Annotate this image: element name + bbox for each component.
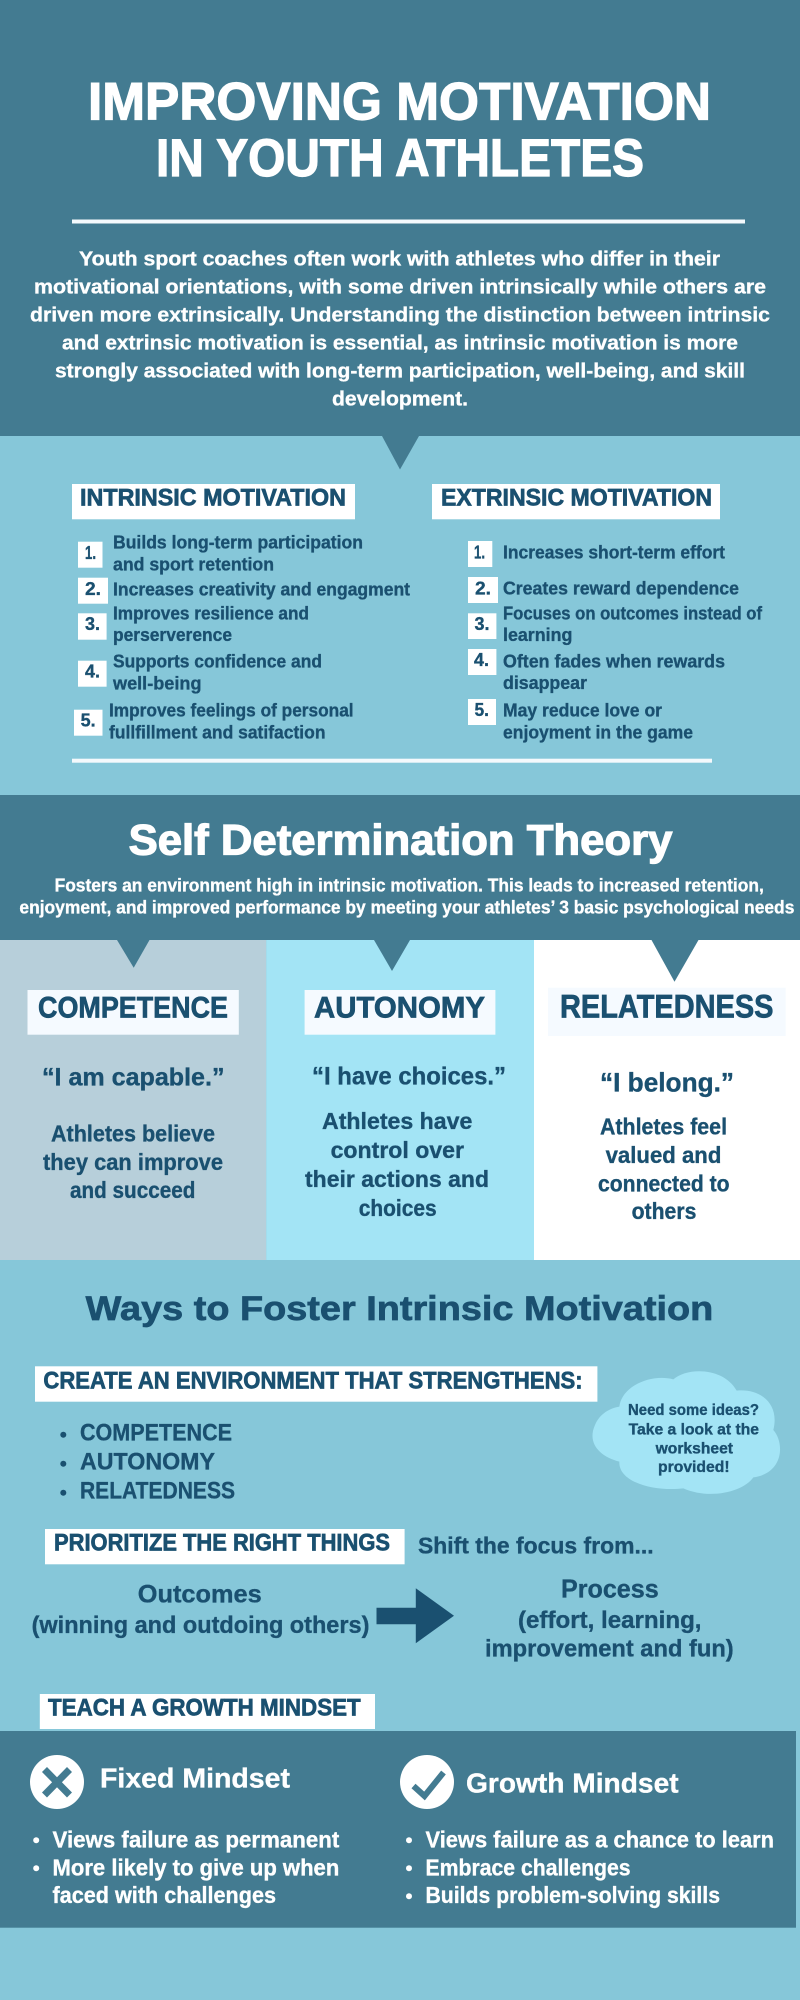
section: create an environment bbox=[35, 1366, 597, 1505]
process text: improvement and fun) bbox=[485, 1636, 734, 1663]
heading: relatedness: RELATEDNESS bbox=[560, 988, 774, 1024]
heading: self determination theory: Self Determination Theory bbox=[129, 816, 672, 864]
intro paragraph: Youth sport coaches often work with athletes who differ in their bbox=[79, 249, 720, 271]
theory description: Fosters an environment high in intrinsic motivation. This leads to increased retention, bbox=[55, 876, 764, 896]
intrinsic item 5: 5. bbox=[81, 710, 96, 731]
outcomes text: Outcomes bbox=[138, 1581, 262, 1609]
panel: relatedness bbox=[534, 940, 800, 1260]
intro paragraph: development. bbox=[332, 389, 468, 411]
intrinsic item 3: perserverence bbox=[113, 624, 232, 645]
autonomy description: choices bbox=[359, 1195, 437, 1221]
autonomy description bbox=[305, 1108, 489, 1221]
intro paragraph: and extrinsic motivation is essential, as intrinsic motivation is more bbox=[62, 333, 738, 355]
arrow: outcomes to process bbox=[376, 1588, 454, 1643]
heading: competence: COMPETENCE bbox=[38, 991, 228, 1024]
panel: extrinsic motivation bbox=[432, 484, 763, 742]
title bbox=[88, 72, 711, 188]
quote: capable: “I am capable.” bbox=[42, 1064, 225, 1092]
panel: mindsets bbox=[0, 1731, 796, 1928]
arrow: autonomy pointer bbox=[374, 940, 410, 971]
heading: growth mindset: Growth Mindset bbox=[466, 1768, 679, 1799]
intrinsic item 2: Increases creativity and engagment bbox=[113, 578, 410, 599]
section: prioritize the right things bbox=[32, 1529, 734, 1663]
arrow: competence pointer bbox=[117, 940, 150, 968]
panel: autonomy bbox=[266, 940, 534, 1260]
relatedness description bbox=[598, 1114, 730, 1224]
quote: belong: “I belong.” bbox=[600, 1068, 734, 1098]
list: fixed mindset: faced with challenges bbox=[52, 1882, 276, 1908]
heading: autonomy bbox=[305, 990, 495, 1035]
title: IMPROVING MOTIVATION bbox=[88, 72, 711, 132]
icon: check circle bbox=[400, 1755, 454, 1809]
heading: teach a growth mindset: TEACH A GROWTH MINDSET bbox=[48, 1695, 361, 1722]
extrinsic item 4: disappear bbox=[503, 672, 587, 693]
extrinsic item 5: May reduce love or bbox=[503, 699, 662, 720]
heading: competence bbox=[28, 990, 239, 1035]
intrinsic item 5 bbox=[74, 699, 354, 742]
extrinsic item 5: 5. bbox=[474, 699, 489, 720]
intrinsic item 2: 2. bbox=[85, 578, 101, 599]
callout: worksheet cloud: worksheet bbox=[655, 1440, 734, 1457]
intrinsic item 3 bbox=[78, 602, 309, 645]
intrinsic item 1 bbox=[78, 531, 363, 574]
relatedness description: valued and bbox=[606, 1142, 721, 1168]
extrinsic item 2 bbox=[468, 577, 739, 603]
competence description: they can improve bbox=[43, 1149, 223, 1175]
autonomy description: their actions and bbox=[305, 1166, 489, 1192]
heading: autonomy: AUTONOMY bbox=[314, 991, 485, 1024]
theory description bbox=[19, 876, 794, 918]
intrinsic item 5: fullfillment and satifaction bbox=[109, 721, 326, 742]
extrinsic item 1: 1. bbox=[474, 541, 485, 562]
shift the focus label: Shift the focus from... bbox=[418, 1533, 654, 1559]
relatedness description: others bbox=[632, 1198, 696, 1224]
panel: intrinsic motivation bbox=[72, 484, 410, 742]
panel: competence bbox=[0, 940, 266, 1260]
competence description bbox=[43, 1121, 223, 1203]
list: fixed mindset: Views failure as permanent bbox=[52, 1826, 340, 1852]
process text: (effort, learning, bbox=[518, 1607, 702, 1634]
list: fixed mindset bbox=[33, 1826, 340, 1908]
intrinsic item 1: Builds long-term participation bbox=[113, 531, 363, 552]
extrinsic item 3: learning bbox=[503, 624, 572, 645]
extrinsic item 2: 2. bbox=[475, 577, 491, 598]
icon: x circle bbox=[30, 1755, 84, 1809]
extrinsic item 3 bbox=[468, 602, 763, 645]
process text: Process bbox=[561, 1573, 659, 1603]
autonomy description: control over bbox=[331, 1137, 464, 1163]
callout: worksheet cloud bbox=[592, 1371, 780, 1494]
heading: extrinsic: EXTRINSIC MOTIVATION bbox=[441, 485, 712, 512]
extrinsic item 4: 4. bbox=[474, 649, 489, 670]
list: growth mindset: Views failure as a chance to learn bbox=[426, 1826, 774, 1852]
heading: prioritize: PRIORITIZE THE RIGHT THINGS bbox=[54, 1530, 390, 1557]
list: growth mindset: Embrace challenges bbox=[426, 1854, 631, 1880]
extrinsic item 5: enjoyment in the game bbox=[503, 721, 693, 742]
list: growth mindset bbox=[406, 1826, 774, 1908]
intrinsic item 5: Improves feelings of personal bbox=[109, 699, 354, 720]
intro paragraph: motivational orientations, with some driven intrinsically while others are bbox=[34, 277, 766, 299]
extrinsic item 1 bbox=[468, 541, 725, 567]
extrinsic item 1: Increases short-term effort bbox=[503, 541, 725, 562]
callout: worksheet cloud: Take a look at the bbox=[629, 1421, 759, 1438]
heading: relatedness bbox=[548, 988, 786, 1036]
quote: choices: “I have choices.” bbox=[312, 1063, 506, 1091]
header divider bbox=[72, 220, 745, 224]
title: IN YOUTH ATHLETES bbox=[156, 129, 644, 188]
list: three needs: AUTONOMY bbox=[80, 1449, 215, 1476]
heading: fixed mindset: Fixed Mindset bbox=[100, 1762, 290, 1793]
intrinsic item 2 bbox=[78, 578, 410, 604]
relatedness description: Athletes feel bbox=[600, 1114, 727, 1140]
arrow: header pointer bbox=[382, 436, 419, 470]
heading: intrinsic: INTRINSIC MOTIVATION bbox=[80, 485, 346, 512]
competence description: Athletes believe bbox=[51, 1121, 215, 1147]
extrinsic item 3: Focuses on outcomes instead of bbox=[503, 602, 763, 623]
list: three needs: COMPETENCE bbox=[80, 1420, 232, 1447]
extrinsic item 4 bbox=[468, 649, 725, 693]
outcomes text: (winning and outdoing others) bbox=[32, 1612, 369, 1639]
intro paragraph: strongly associated with long-term participation, well-being, and skill bbox=[55, 361, 745, 383]
process text bbox=[485, 1573, 734, 1663]
list: growth mindset: Builds problem-solving skills bbox=[426, 1882, 720, 1908]
relatedness description: connected to bbox=[598, 1170, 730, 1196]
list: fixed mindset: More likely to give up when bbox=[52, 1854, 339, 1880]
intrinsic item 4: 4. bbox=[85, 661, 100, 682]
panel: header bbox=[0, 0, 800, 436]
intrinsic item 1: and sport retention bbox=[113, 553, 274, 574]
competence description: and succeed bbox=[70, 1177, 195, 1203]
intrinsic item 4: Supports confidence and bbox=[113, 650, 322, 671]
callout: worksheet cloud: Need some ideas? bbox=[628, 1402, 759, 1419]
theory description: enjoyment, and improved performance by meeting your athletes’ 3 basic psychological needs bbox=[19, 898, 794, 918]
outcomes text bbox=[32, 1581, 369, 1639]
intro paragraph bbox=[30, 249, 770, 411]
intrinsic item 1: 1. bbox=[85, 542, 96, 563]
autonomy description: Athletes have bbox=[322, 1108, 472, 1134]
intrinsic item 3: 3. bbox=[85, 613, 100, 634]
extrinsic item 3: 3. bbox=[474, 613, 490, 634]
extrinsic item 2: Creates reward dependence bbox=[503, 577, 739, 598]
list: three needs: RELATEDNESS bbox=[80, 1478, 235, 1505]
heading: create an environment: CREATE AN ENVIRONMENT THAT STRENGTHENS: bbox=[43, 1368, 583, 1395]
extrinsic item 5 bbox=[468, 699, 693, 742]
intro paragraph: driven more extrinsically. Understanding the distinction between intrinsic bbox=[30, 305, 770, 327]
extrinsic item 4: Often fades when rewards bbox=[503, 650, 725, 671]
intrinsic item 4: well-being bbox=[112, 672, 202, 693]
heading: ways to foster intrinsic motivation: Ways to Foster Intrinsic Motivation bbox=[86, 1290, 713, 1328]
panel: self determination theory bbox=[0, 795, 800, 940]
intrinsic item 3: Improves resilience and bbox=[113, 602, 309, 623]
intrinsic item 4 bbox=[78, 650, 322, 693]
callout: worksheet cloud: provided! bbox=[658, 1459, 730, 1476]
list: three needs bbox=[60, 1420, 235, 1505]
arrow: relatedness pointer bbox=[652, 940, 698, 982]
